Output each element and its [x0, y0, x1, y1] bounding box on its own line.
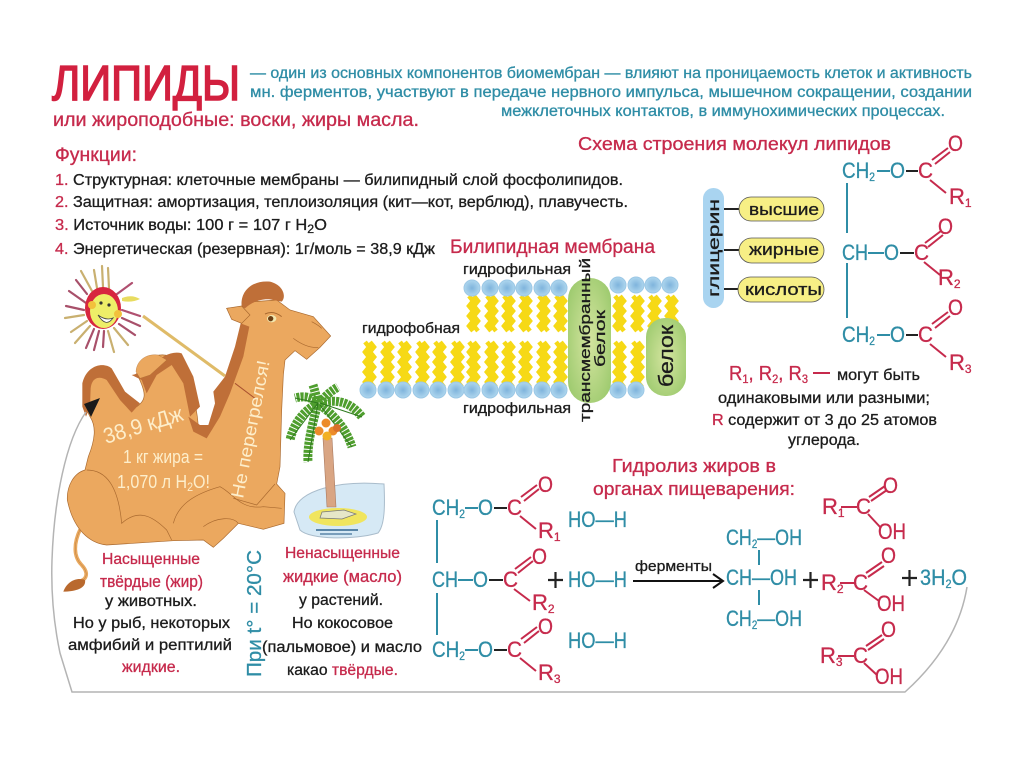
- formula: triglyceride: [842, 131, 972, 376]
- subtitle: waxes, fats, oils: или жироподобные: воски, жиры масла.: [53, 110, 419, 131]
- plus sign: [548, 572, 563, 588]
- upper heads: [464, 277, 678, 296]
- reagent row 1: CH: [432, 495, 464, 520]
- membrane heading: Билипидная мембрана: [450, 237, 655, 258]
- reagent row 3: C: [507, 637, 522, 662]
- row 2: C: [914, 240, 929, 265]
- camel text: 2: [187, 480, 193, 494]
- formula: glycerol product: CH: [726, 606, 758, 631]
- protein: [646, 318, 686, 396]
- reagent row 1: 2: [459, 507, 465, 521]
- camel ear: [227, 306, 250, 323]
- acid 3: R: [820, 643, 836, 668]
- row 1: O: [948, 131, 963, 156]
- water molecules: HO—H: [568, 567, 627, 592]
- camel text: 38,9 кДж: [100, 401, 186, 449]
- pill: fatty: [739, 238, 824, 263]
- connectors: [724, 209, 740, 289]
- text: radicals note: , R: [778, 363, 802, 385]
- text: unsaturated fats: жидкие (масло): [283, 568, 402, 586]
- text: radicals note: R: [729, 363, 743, 385]
- acid 2: C: [853, 570, 868, 595]
- formula: fatty acids: [820, 473, 906, 689]
- reagent row 2: O: [532, 544, 547, 569]
- functions list: [55, 172, 628, 258]
- row 3: 2: [869, 334, 875, 348]
- text: unsaturated fats: у растений.: [299, 592, 383, 609]
- text: radicals note: углерода.: [788, 432, 860, 449]
- row 3: [842, 295, 972, 376]
- acid 1: OH: [878, 519, 906, 544]
- text: radicals note: , R: [749, 363, 772, 385]
- camel tail: [63, 528, 86, 592]
- arrow: enzymes: [633, 559, 723, 588]
- text: unsaturated fats: Но кокосовое: [292, 615, 393, 632]
- reagent row 3: [432, 614, 561, 686]
- camel hump top: [136, 355, 167, 378]
- camel body: [67, 300, 331, 547]
- intro text: мн. ферментов, участвуют в передаче нервного импульса, мышечном сокращении, создании: [250, 84, 972, 101]
- camel hair: [82, 281, 284, 438]
- row 2: O: [884, 240, 899, 265]
- title: ЛИПИДЫ: [52, 57, 240, 111]
- reagent row 1: R: [538, 518, 554, 543]
- membrane labels: [362, 262, 571, 417]
- functions list: O: [314, 217, 327, 234]
- acid 1: C: [856, 494, 871, 519]
- text: saturated fats: [68, 551, 232, 676]
- row 1: [842, 131, 972, 210]
- icon: sun: [65, 266, 140, 352]
- acid 1: O: [883, 473, 898, 498]
- acid 1: [822, 473, 906, 544]
- functions list: 2: [307, 222, 315, 236]
- reagent row 3: CH: [432, 637, 464, 662]
- pill: acids: [738, 277, 824, 302]
- functions list: 4. Энергетическая (резервная): 1г/моль = 38,9 кДж: [55, 241, 435, 258]
- row 2: [842, 214, 961, 291]
- pill: higher: [739, 197, 824, 221]
- reagent row 3: O: [478, 637, 493, 662]
- row 3: R: [949, 350, 965, 375]
- glycerol box: [703, 188, 724, 308]
- acid 3: C: [853, 643, 868, 668]
- upper tails: [469, 296, 676, 331]
- reagent row 1: O: [538, 472, 553, 497]
- formula: fat reagent: [432, 472, 561, 686]
- acid 3: 3: [836, 655, 843, 669]
- water molecules: HO—H: [568, 507, 627, 532]
- reagent row 1: O: [478, 495, 493, 520]
- lower tails: [365, 342, 642, 387]
- formula: glycerol product: —OH: [757, 606, 802, 631]
- row 1: C: [918, 158, 933, 183]
- diagram labels: кислоты: [745, 280, 822, 299]
- text: temperature: При t° = 20°C: [244, 550, 266, 677]
- hydrolysis heading: [593, 456, 795, 499]
- row 1: CH: [842, 158, 874, 183]
- water molecules: HO—H: [568, 628, 627, 653]
- acid 1: R: [822, 494, 838, 519]
- text: unsaturated fats: (пальмовое) и масло: [262, 639, 422, 656]
- arrow: enzymes: ферменты: [635, 559, 712, 575]
- acid 2: [821, 543, 905, 616]
- diagram labels: глицерин: [706, 199, 723, 297]
- hydrolysis heading: Гидролиз жиров в: [612, 456, 776, 476]
- text: radicals note: [712, 363, 937, 449]
- protein labels: белок: [593, 309, 609, 367]
- camel text: Не перегрелся!: [227, 359, 274, 500]
- reagent row 2: [432, 544, 555, 616]
- row 3: CH: [842, 322, 874, 347]
- row 1: O: [890, 158, 905, 183]
- diagram labels: [706, 199, 822, 299]
- text: saturated fats: жидкие.: [122, 659, 180, 676]
- row 2: 2: [954, 277, 961, 291]
- membrane labels: гидрофильная: [463, 262, 571, 278]
- reagent row 1: [432, 472, 561, 544]
- intro text: — один из основных компонентов биомембран — влияют на проницаемость клеток и активность: [250, 65, 972, 82]
- reagent row 3: R: [538, 660, 554, 685]
- row 3: C: [918, 322, 933, 347]
- lower heads: [360, 382, 644, 398]
- camel text: [100, 359, 274, 500]
- camel text: 1 кг жира =: [123, 447, 203, 467]
- formula: glycerol product: CH: [726, 525, 758, 550]
- camel text: O!: [193, 472, 210, 492]
- reagent row 2: CH: [432, 567, 458, 592]
- formula: glycerol product: CH—OH: [726, 565, 797, 590]
- reagent row 2: 2: [548, 602, 555, 616]
- text: saturated fats: у животных.: [105, 593, 197, 610]
- acid 2: 2: [837, 582, 844, 596]
- row 3: 3: [965, 362, 972, 376]
- acid 3: OH: [875, 664, 903, 689]
- row 2: CH: [842, 240, 868, 265]
- plus sign: [803, 572, 818, 588]
- text: unsaturated fats: [262, 545, 422, 679]
- protein labels: белок: [656, 325, 678, 387]
- plus sign: [902, 570, 917, 586]
- camel eye: [265, 312, 282, 322]
- text: saturated fats: амфибий и рептилий: [68, 637, 232, 654]
- text: saturated fats: твёрдые (жир): [100, 573, 203, 591]
- formula: water product: 2: [945, 577, 952, 591]
- icon: palm island: [290, 385, 384, 538]
- outline frame with arrow to the hump: [52, 398, 967, 692]
- intro text: межклеточных контактов, в иммунохимических процессах.: [501, 103, 945, 120]
- formula: glycerol product: 2: [752, 537, 758, 551]
- functions list: 3. Источник воды: 100 г = 107 г H: [55, 217, 301, 234]
- scheme heading: Схема строения молекул липидов: [578, 134, 891, 154]
- diagram: glycerol and fatty acids: [703, 188, 824, 308]
- functions list: 2. Защитная: амортизация, теплоизоляция (кит—кот, верблюд), плавучесть.: [55, 194, 628, 211]
- text: unsaturated fats: Ненасыщенные: [285, 545, 400, 562]
- diagram labels: жирные: [749, 240, 819, 259]
- acid 2: OH: [877, 591, 905, 616]
- intro text: [250, 65, 972, 120]
- row 1: 1: [965, 196, 972, 210]
- reagent row 2: R: [532, 590, 548, 615]
- acid 2: O: [881, 543, 896, 568]
- membrane labels: гидрофильная: [463, 401, 571, 417]
- functions heading: Функции:: [55, 145, 137, 166]
- formula: glycerol product: [726, 525, 802, 632]
- chart: lipid bilayer membrane: [360, 258, 686, 422]
- water molecules: [568, 507, 627, 653]
- reagent row 3: O: [538, 614, 553, 639]
- membrane labels: гидрофобная: [362, 321, 460, 337]
- text: radicals note: одинаковыми или разными;: [718, 390, 930, 407]
- acid 1: 1: [838, 506, 845, 520]
- hydrolysis heading: органах пищеварения:: [593, 479, 795, 499]
- text: radicals note: 2: [772, 372, 779, 386]
- formula: water product: 3H: [920, 565, 948, 590]
- row 2: O: [938, 214, 953, 239]
- text: radicals note: 3: [802, 372, 808, 386]
- camel: [63, 281, 331, 592]
- protein labels: трансмембранный: [578, 258, 594, 422]
- row 1: 2: [869, 170, 875, 184]
- reagent row 3: 3: [554, 672, 561, 686]
- reagent row 3: 2: [459, 649, 465, 663]
- transmembrane protein: [568, 278, 611, 403]
- acid 3: O: [881, 617, 896, 642]
- text: radicals note: 1: [742, 372, 749, 386]
- row 3: O: [948, 295, 963, 320]
- row 3: O: [890, 322, 905, 347]
- text: unsaturated fats: какао твёрдые.: [287, 662, 398, 679]
- text: radicals note: R содержит от 3 до 25 атомов: [712, 412, 937, 429]
- neck strap: [235, 383, 255, 398]
- text: saturated fats: Но у рыб, некоторых: [73, 615, 230, 632]
- reagent row 1: 1: [554, 530, 561, 544]
- text: saturated fats: Насыщенные: [102, 551, 200, 568]
- camel text: 1,070 л H: [117, 472, 196, 492]
- functions list: 1. Структурная: клеточные мембраны — билипидный слой фосфолипидов.: [55, 172, 623, 189]
- acid 2: R: [821, 570, 837, 595]
- protein labels: [578, 258, 678, 422]
- row 1: R: [949, 184, 965, 209]
- diagram labels: высшие: [749, 200, 819, 219]
- formula: glycerol product: 2: [752, 618, 758, 632]
- row 2: R: [938, 265, 954, 290]
- formula: glycerol product: —OH: [757, 525, 802, 550]
- sun ray to camel: [143, 316, 225, 376]
- reagent row 2: O: [473, 567, 488, 592]
- reagent row 1: C: [507, 495, 522, 520]
- formula: water product: O: [952, 565, 967, 590]
- text: radicals note: могут быть: [837, 367, 920, 384]
- acid 3: [820, 617, 903, 689]
- reagent row 2: C: [503, 567, 518, 592]
- camel mouth and legs: [87, 322, 322, 540]
